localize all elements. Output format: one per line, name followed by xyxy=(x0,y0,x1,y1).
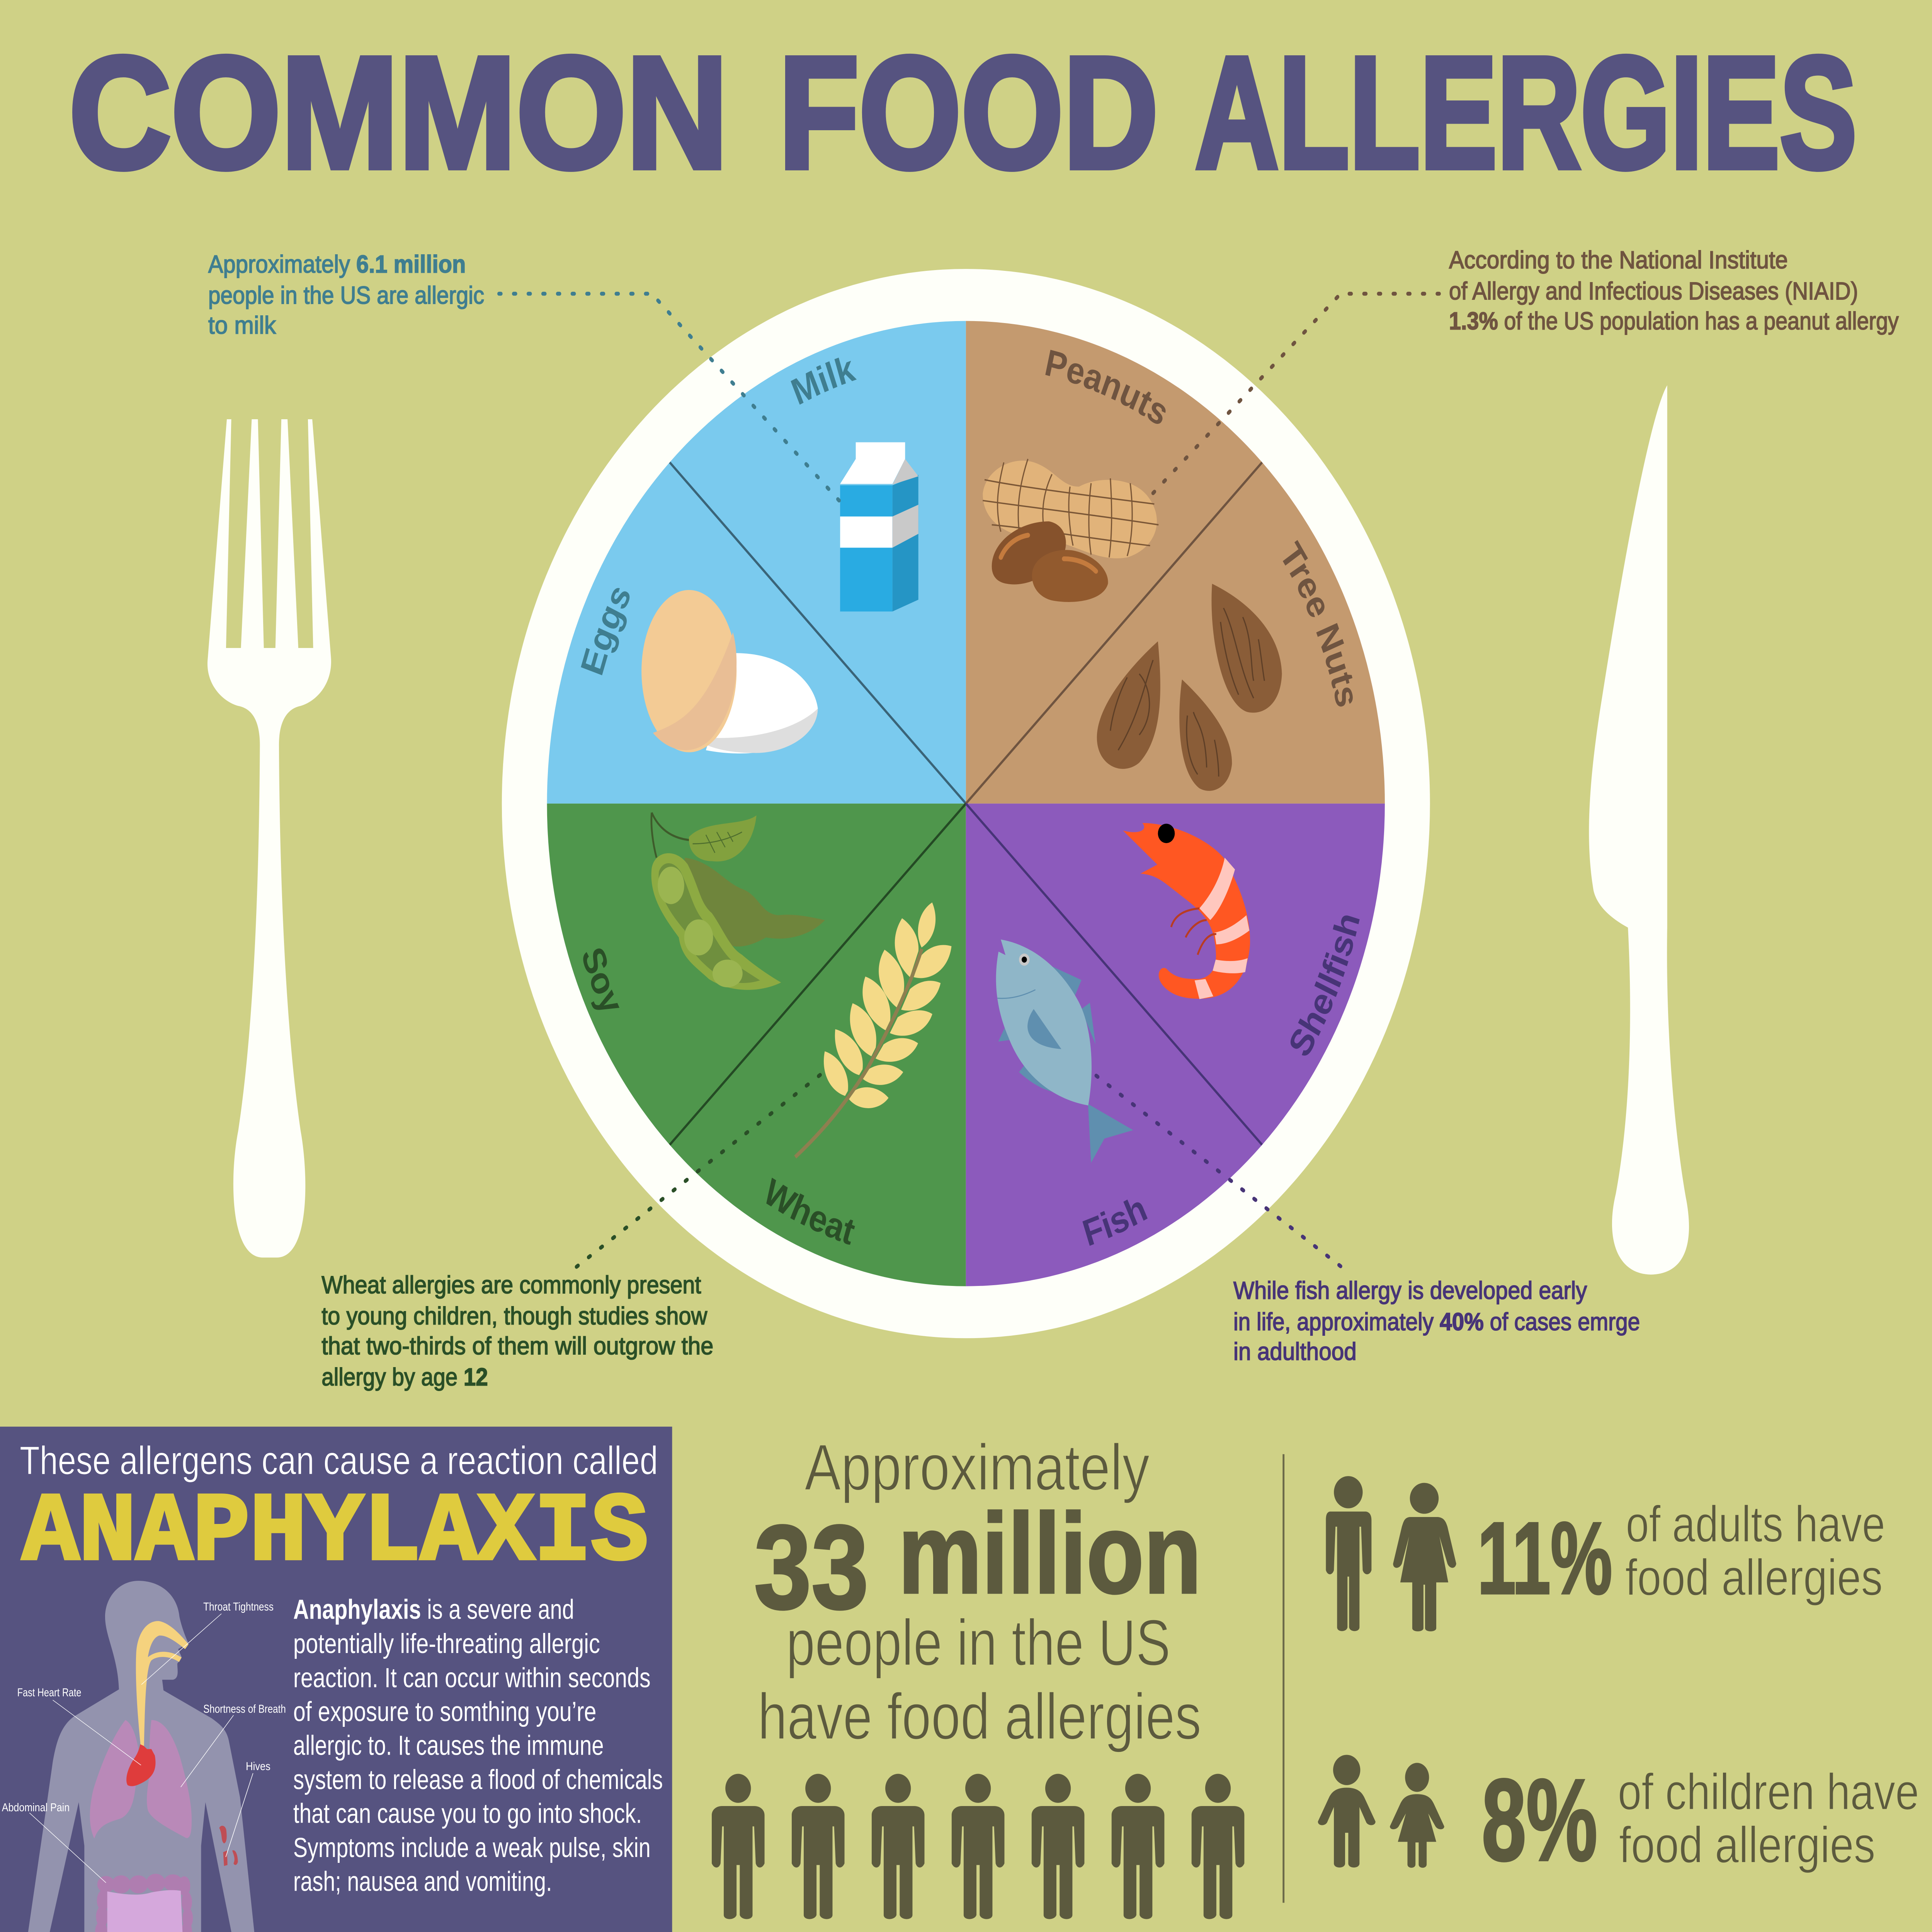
icon: soybean pod xyxy=(651,813,825,990)
callout: milk: people in the US are allergic xyxy=(208,282,484,309)
title: FOOD xyxy=(779,24,1158,201)
anaphylaxis paragraph: reaction. It can occur within seconds xyxy=(293,1662,651,1693)
icon: milk carton xyxy=(840,442,918,612)
icon: knife xyxy=(1589,385,1689,1275)
callout: peanuts: of Allergy and Infectious Diseases (NIAID) xyxy=(1449,277,1858,305)
anaphylaxis paragraph: Symptoms include a weak pulse, skin xyxy=(293,1832,651,1863)
icon: peanuts xyxy=(983,459,1158,602)
segment: fish and shellfish xyxy=(966,804,1385,1286)
icon: fork xyxy=(207,419,331,1258)
callout: peanuts: According to the National Institute xyxy=(1449,246,1788,274)
statistic: 33 million: people in the US xyxy=(786,1606,1170,1679)
callout: fish: in life, approximately 40% of cases emrge xyxy=(1233,1308,1640,1335)
callout: wheat xyxy=(321,1271,713,1391)
segment: milk and eggs xyxy=(547,321,966,804)
callout: fish: While fish allergy is developed early xyxy=(1233,1277,1587,1304)
body diagram labels: Abdominal Pain xyxy=(2,1801,70,1814)
icon: fish xyxy=(996,939,1133,1163)
body diagram labels: Shortness of Breath xyxy=(203,1702,286,1715)
statistic: 8% of children: food allergies xyxy=(1619,1816,1875,1874)
label: Milk: Milk xyxy=(786,347,859,413)
statistic: 33 million: million xyxy=(898,1490,1201,1617)
anaphylaxis paragraph: potentially life-threating allergic xyxy=(293,1628,600,1659)
label: Fish: Fish xyxy=(1078,1187,1153,1254)
icon row: seven people xyxy=(712,1774,1244,1919)
statistic: 11% of adults: 11% xyxy=(1477,1502,1612,1615)
vertical divider xyxy=(1283,1454,1284,1903)
statistic: 11% of adults: of adults have xyxy=(1626,1496,1885,1553)
callout: wheat: Wheat allergies are commonly present xyxy=(321,1271,701,1299)
label: Peanuts: Peanuts xyxy=(1041,342,1175,434)
statistic: 33 million xyxy=(754,1431,1201,1753)
statistic: 33 million: Approximately xyxy=(804,1431,1150,1504)
icon: tree nuts xyxy=(1097,584,1282,791)
panel: anaphylaxis xyxy=(0,1427,672,1932)
body diagram labels xyxy=(2,1600,286,1814)
icon: adult man and woman xyxy=(1326,1476,1456,1631)
body diagram xyxy=(28,1581,254,1932)
segment: peanuts and tree nuts xyxy=(966,321,1385,804)
plate xyxy=(502,269,1430,1338)
body diagram labels: Hives xyxy=(246,1760,270,1773)
callout: wheat: allergy by age 12 xyxy=(321,1363,488,1391)
plate rim xyxy=(502,269,1430,1338)
callout: wheat: to young children, though studies show xyxy=(321,1302,707,1330)
segment: soy and wheat xyxy=(547,804,966,1286)
callout: fish: in adulthood xyxy=(1233,1338,1357,1365)
anaphylaxis paragraph: system to release a flood of chemicals xyxy=(293,1764,663,1795)
dotted leader: peanuts xyxy=(1150,294,1439,497)
callout: milk: Approximately 6.1 million xyxy=(208,250,466,278)
statistic: 11% of adults xyxy=(1477,1496,1885,1615)
anaphylaxis paragraph: Anaphylaxis is a severe and xyxy=(293,1594,574,1625)
anaphylaxis paragraph xyxy=(293,1594,663,1897)
dotted leader: wheat xyxy=(577,1073,823,1267)
callout: milk xyxy=(208,250,484,339)
statistic: 8% of children: 8% xyxy=(1482,1755,1597,1885)
callout: fish xyxy=(1233,1277,1640,1365)
statistic: 8% of children xyxy=(1482,1755,1919,1885)
icon: boy and girl xyxy=(1318,1755,1444,1868)
icon: eggs xyxy=(641,590,818,753)
dotted leader: milk xyxy=(499,294,839,500)
body diagram labels: Throat Tightness xyxy=(203,1600,274,1613)
icon: shrimp xyxy=(1123,823,1250,999)
callout: peanuts: 1.3% of the US population has a peanut allergy xyxy=(1449,307,1899,335)
title: COMMON xyxy=(69,24,728,201)
icon: wheat xyxy=(795,902,951,1157)
statistic: 11% of adults: food allergies xyxy=(1625,1549,1883,1606)
anaphylaxis paragraph: that can cause you to go into shock. xyxy=(293,1798,642,1829)
callout: wheat: that two-thirds of them will outgrow the xyxy=(321,1332,713,1360)
panel heading: These allergens can cause a reaction called xyxy=(20,1439,658,1483)
label: Tree Nuts: Tree Nuts xyxy=(1273,536,1366,711)
callout: milk: to milk xyxy=(208,311,276,339)
anaphylaxis paragraph: allergic to. It causes the immune xyxy=(293,1730,604,1761)
statistic: 8% of children: of children have xyxy=(1618,1764,1919,1820)
anaphylaxis heading: ANAPHYLAXIS xyxy=(22,1479,648,1588)
label: Shellfish: Shellfish xyxy=(1282,908,1367,1064)
body diagram labels: Fast Heart Rate xyxy=(17,1686,81,1699)
title xyxy=(69,24,1857,201)
dotted leader: fish xyxy=(1094,1074,1340,1266)
anaphylaxis paragraph: of exposure to somthing you’re xyxy=(293,1696,596,1727)
label: Soy: Soy xyxy=(574,942,630,1020)
callout: peanuts xyxy=(1449,246,1899,335)
statistic: 33 million: 33 xyxy=(754,1501,869,1634)
label: Eggs: Eggs xyxy=(574,578,638,680)
label: Wheat: Wheat xyxy=(758,1171,859,1253)
anaphylaxis paragraph: rash; nausea and vomiting. xyxy=(293,1866,552,1897)
statistic: 33 million: have food allergies xyxy=(758,1680,1201,1753)
